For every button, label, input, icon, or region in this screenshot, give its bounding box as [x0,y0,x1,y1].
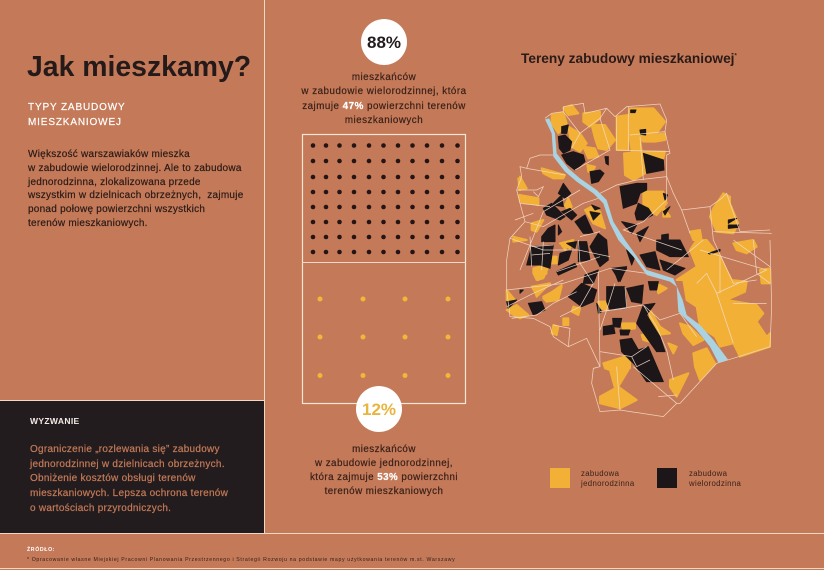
legend: multi-family label: wielorodzinna [689,479,741,488]
map title: Tereny zabudowy mieszkaniowej* [521,51,737,66]
source note: ŹRÓDŁO: [27,547,55,553]
legend: multi-family swatch [657,468,677,488]
intro text: Większość warszawiaków mieszka [28,149,190,160]
map of Warsaw [506,102,772,417]
text: multi-family residents: mieszkańców [352,72,416,83]
challenge text: jednorodzinnej w dzielnicach obrzeżnych. [30,459,225,470]
text: multi-family residents: zajmuje 47% powierzchni terenów [302,101,466,112]
map: district boundaries [507,103,772,417]
intro text: wszystkim w dzielnicach obrzeżnych, zajmuje [28,190,244,201]
source note: * Opracowanie własne Miejskiej Pracowni Planowania Przestrzennego i Strategii Rozwoju na podstawie mapy użytkowania terenów m.st. Warszawy [27,557,455,563]
challenge text [30,444,228,514]
dot chart: housing share [302,134,466,404]
badge: 12%: 12% [362,400,396,419]
subheading: types of housing: MIESZKANIOWEJ [28,117,122,128]
legend: multi-family label [689,469,741,488]
subheading: types of housing: TYPY ZABUDOWY [28,102,126,113]
text: single-family residents: która zajmuje 53% powierzchni [310,472,458,483]
intro text: terenów mieszkaniowych. [28,218,148,229]
challenge text: o wartościach przyrodniczych. [30,503,171,514]
legend [550,468,741,488]
panel: challenge [0,401,264,533]
intro text: w zabudowie wielorodzinnej. Ale to zabudowa [28,163,242,174]
legend: multi-family label: zabudowa [689,469,727,478]
legend: single-family label: zabudowa [581,469,619,478]
challenge text: Ograniczenie „rozlewania się” zabudowy [30,444,220,455]
text: multi-family residents: mieszkaniowych [345,115,423,126]
subheading: types of housing [28,102,126,128]
text: single-family residents: mieszkańców [352,444,416,455]
title: Jak mieszkamy? [27,51,251,83]
dots: multi-family [311,143,460,254]
map: multi-family areas [507,110,738,382]
dots: single-family [318,296,450,378]
text: multi-family residents [301,72,467,126]
badge: 88% [361,19,407,65]
text: single-family residents [310,444,458,497]
map: Vistula river [545,118,728,363]
legend: single-family label: jednorodzinna [581,479,635,488]
legend: single-family swatch [550,468,570,488]
source note [27,546,455,563]
text: single-family residents: w zabudowie jednorodzinnej, [315,458,453,469]
badge: 88%: 88% [367,33,401,52]
intro text: ponad połowę powierzchni wszystkich [28,204,205,215]
map: single-family areas [507,105,770,408]
legend: single-family label [580,469,635,488]
badge: 12% [356,386,402,432]
challenge text: mieszkaniowych. Lepsza ochrona terenów [30,488,228,499]
challenge heading: WYZWANIE [30,416,80,426]
intro text: jednorodzinna, zlokalizowana przede [28,177,201,188]
text: single-family residents: terenów mieszkaniowych [325,486,443,497]
intro text [28,149,244,229]
challenge text: Obniżenie kosztów obsługi terenów [30,473,196,484]
text: multi-family residents: w zabudowie wielorodzinnej, która [301,86,467,97]
